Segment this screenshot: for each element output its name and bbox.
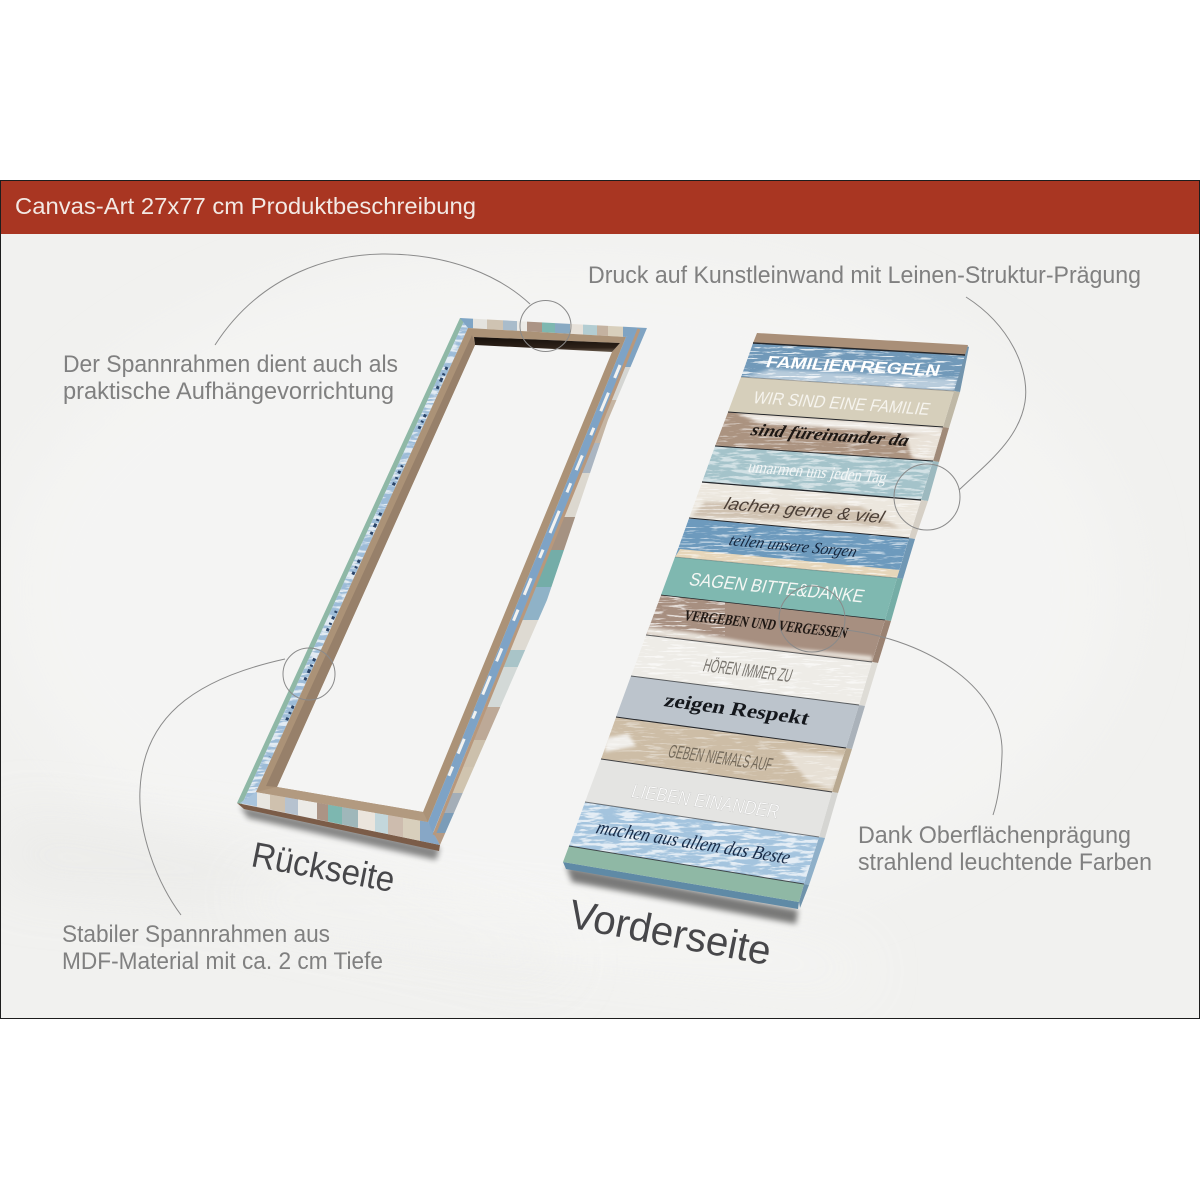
callout: stretcher: Stabiler Spannrahmen aus xyxy=(62,921,330,948)
callout: hanging: Der Spannrahmen dient auch als xyxy=(63,351,398,378)
top wrap stripes xyxy=(460,318,646,337)
title: Canvas-Art 27x77 cm Produktbeschreibung xyxy=(15,193,476,219)
bottom wrap stripes xyxy=(240,792,440,845)
plank: umarmen uns jeden Tag xyxy=(702,446,933,500)
inner shadow of stretcher xyxy=(474,337,620,352)
header bar xyxy=(1,181,1199,234)
canvas right side xyxy=(799,345,969,908)
canvas lettering: LIEBEN EINANDER xyxy=(628,781,782,823)
callout: canvas print xyxy=(588,262,1141,530)
plank: lachen gerne und viel xyxy=(690,483,920,538)
callout: hanging: praktische Aufhängevorrichtung xyxy=(63,378,394,405)
label: Rückseite: Rückseite xyxy=(248,835,398,900)
left wrap band with mirrored lettering xyxy=(237,318,468,804)
plank: Hören immer zu xyxy=(628,633,872,707)
canvas lettering: WIR SIND EINE FAMILIE xyxy=(751,387,933,419)
plank: teilen unsere Sorgen xyxy=(675,516,911,580)
canvas lettering: sind füreinander da xyxy=(748,419,912,450)
product: back side frame xyxy=(230,310,655,860)
label: Vorderseite: Vorderseite xyxy=(565,891,775,974)
canvas lettering: SAGEN BITTE&DANKE xyxy=(687,568,867,606)
canvas lettering xyxy=(593,353,942,869)
canvas lettering: teilen unsere Sorgen xyxy=(727,530,860,561)
plank gaps xyxy=(569,343,965,884)
canvas lettering: lachen gerne & viel xyxy=(722,493,888,527)
right outer side stripes xyxy=(430,325,655,847)
plank: Vergeben und Vergessen xyxy=(645,593,885,662)
callout: stretcher xyxy=(62,648,383,975)
canvas lettering: machen aus allem das Beste xyxy=(593,818,793,869)
panel background xyxy=(0,180,1200,1018)
product: front side canvas xyxy=(563,333,970,924)
canvas lettering: zeigen Respekt xyxy=(661,690,813,730)
plank: Sagen Bitte und Danke xyxy=(661,557,897,620)
plank: Familien Regeln xyxy=(741,344,964,391)
plank: sind füreinander da xyxy=(715,412,942,461)
plank: Lieben einander xyxy=(585,759,832,837)
callout: canvas print: Druck auf Kunstleinwand mit Leinen-Struktur-Prägung xyxy=(588,262,1141,289)
plank: Wir sind eine Familie xyxy=(728,377,954,427)
callout: embossing: strahlend leuchtende Farben xyxy=(858,849,1152,876)
callout: embossing xyxy=(779,586,1152,876)
frame bottom edge xyxy=(237,803,440,851)
canvas lettering: VERGEBEN UND VERGESSEN xyxy=(682,607,850,642)
right wrap band xyxy=(428,329,639,835)
plank: bottom green xyxy=(563,846,804,902)
plank: Geben niemals auf xyxy=(600,715,846,795)
plank: top brown xyxy=(753,333,968,355)
plank: machen aus allem das Beste xyxy=(565,800,820,888)
callout: stretcher: MDF-Material mit ca. 2 cm Tiefe xyxy=(62,948,383,975)
canvas lettering: HÖREN IMMER ZU xyxy=(701,655,795,686)
canvas bottom edge xyxy=(563,862,799,909)
canvas lettering: umarmen uns jeden Tag xyxy=(746,456,890,487)
brown stretcher bar xyxy=(256,328,626,822)
callout: embossing: Dank Oberflächenprägung xyxy=(858,822,1131,849)
canvas lettering: GEBEN NIEMALS AUF xyxy=(666,741,775,775)
canvas lettering: FAMILIEN REGELN xyxy=(764,353,942,380)
frame shadow xyxy=(240,806,440,860)
canvas shadow xyxy=(566,866,798,924)
plank: zeigen Respekt xyxy=(616,676,859,748)
callout: hanging xyxy=(63,254,571,405)
